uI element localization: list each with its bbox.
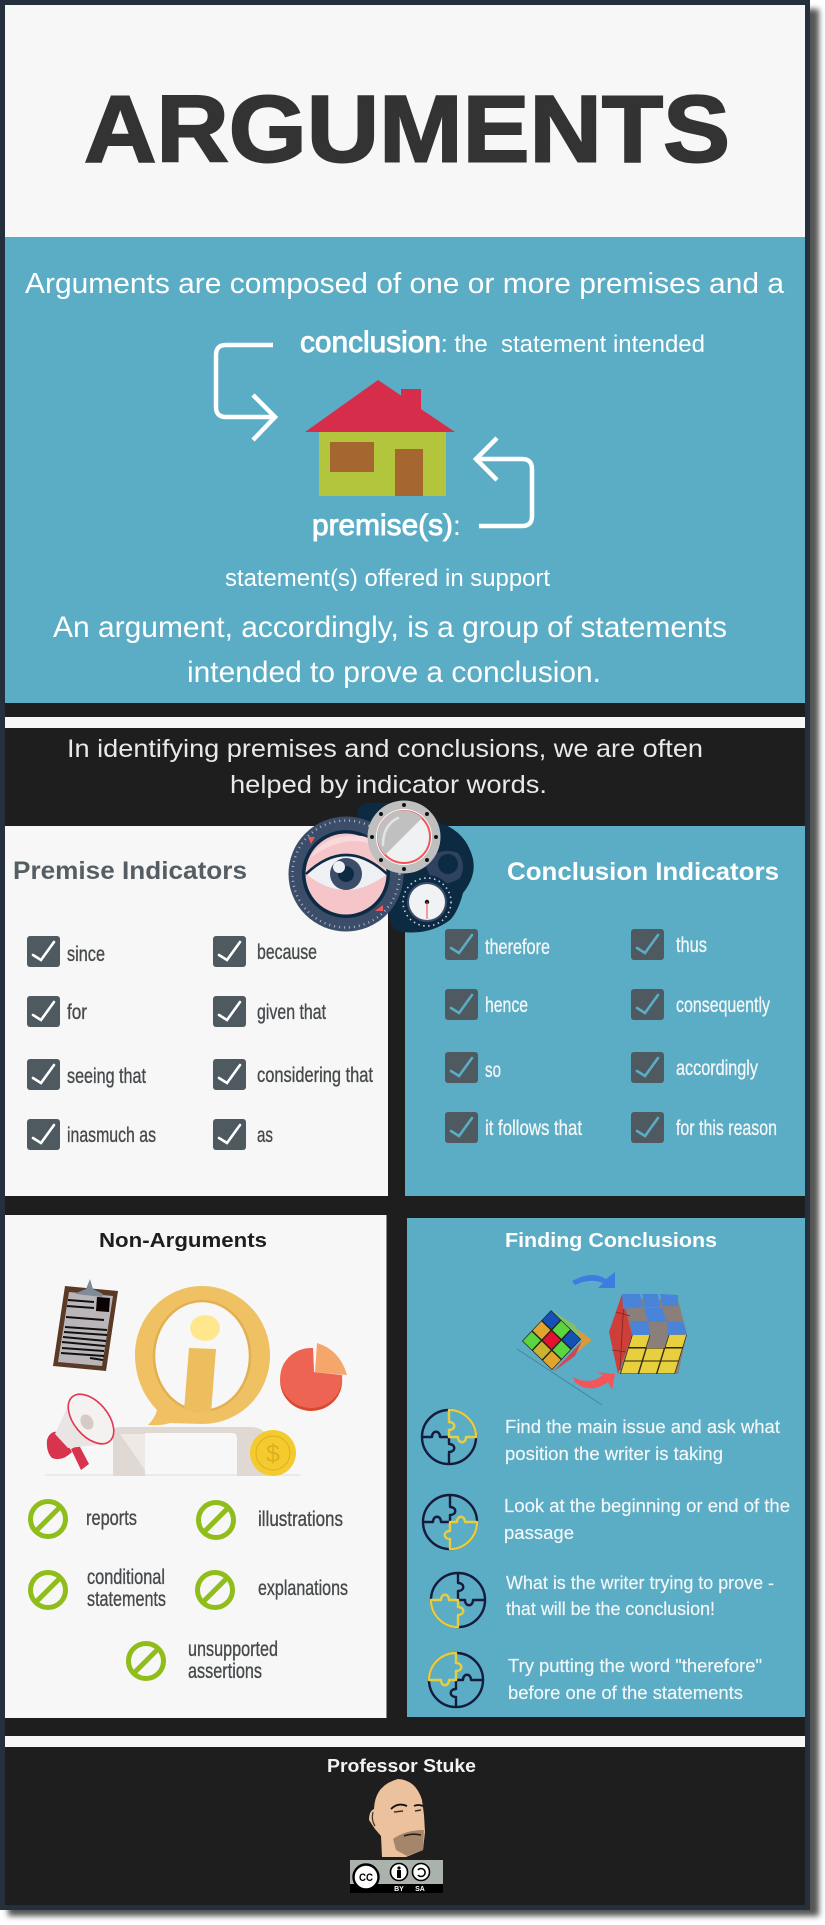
item: since xyxy=(27,936,105,967)
text: step 1 xyxy=(505,1417,780,1464)
conclusion label xyxy=(300,326,705,359)
illustration: coin: $ xyxy=(266,1440,280,1468)
item: given that: given that xyxy=(257,1000,326,1024)
item: given that xyxy=(213,996,326,1027)
item: consequently: consequently xyxy=(676,993,770,1017)
item: seeing that xyxy=(27,1059,146,1090)
text: step 3: What is the writer trying to prove - xyxy=(506,1573,774,1593)
item: explanations xyxy=(198,1572,348,1608)
item: inasmuch as xyxy=(27,1119,156,1150)
item: so: so xyxy=(485,1058,501,1082)
text: step 1: position the writer is taking xyxy=(505,1444,723,1464)
item: conditional statements: statements xyxy=(87,1587,166,1611)
item: accordingly: accordingly xyxy=(676,1056,758,1080)
footer xyxy=(327,1756,476,1893)
item: thus: thus xyxy=(676,933,707,957)
heading: Finding Conclusions xyxy=(505,1230,717,1252)
illustration: coin xyxy=(250,1430,296,1476)
license badge: CC xyxy=(359,1872,373,1884)
panel: finding conclusions xyxy=(407,1218,805,1717)
arrow: conclusion to house xyxy=(216,345,275,440)
text: step 4: Try putting the word "therefore" xyxy=(508,1656,762,1676)
text: step 3 xyxy=(506,1573,774,1619)
item: as: as xyxy=(257,1123,273,1147)
item: for xyxy=(27,996,87,1027)
item: because xyxy=(213,936,317,967)
item: since: since xyxy=(67,942,105,966)
item: unsupported assertions: unsupported xyxy=(188,1637,278,1661)
panel: title xyxy=(5,5,805,237)
item: it follows that xyxy=(445,1112,582,1143)
illustration: cubes and arrows xyxy=(517,1272,687,1405)
icon: puzzle 3 xyxy=(431,1573,485,1627)
license badge xyxy=(350,1860,443,1893)
item: for this reason xyxy=(631,1112,777,1143)
premise description: statement(s) offered in support xyxy=(225,565,550,592)
item: seeing that: seeing that xyxy=(67,1064,146,1088)
panel: definition xyxy=(5,237,805,703)
text: step 2 xyxy=(504,1496,790,1543)
item: as xyxy=(213,1119,273,1150)
text: step 2: passage xyxy=(504,1523,574,1543)
illustration: information symbol xyxy=(45,1286,300,1476)
portrait xyxy=(369,1779,425,1857)
item: considering that: considering that xyxy=(257,1063,373,1087)
item: unsupported assertions: assertions xyxy=(188,1659,262,1683)
illustration: pie chart xyxy=(280,1343,347,1411)
heading: Conclusion Indicators xyxy=(507,858,779,886)
item: so xyxy=(445,1052,501,1083)
item: reports xyxy=(30,1502,137,1536)
item: conditional statements: conditional xyxy=(87,1565,165,1589)
icon: puzzle 4 xyxy=(429,1653,483,1707)
item: consequently xyxy=(631,989,770,1020)
argument definition: An argument, accordingly, is a group of statements xyxy=(53,611,727,644)
item: illustrations xyxy=(198,1502,343,1538)
item: explanations: explanations xyxy=(258,1576,348,1600)
conclusion label: conclusion xyxy=(300,326,441,359)
item: accordingly xyxy=(631,1052,758,1083)
item: inasmuch as: inasmuch as xyxy=(67,1123,156,1147)
argument definition xyxy=(53,611,727,689)
text: step 4 xyxy=(508,1656,762,1703)
panel: non-arguments xyxy=(5,1215,387,1718)
premise label: premise(s) xyxy=(312,509,453,542)
panel: conclusion indicators xyxy=(405,826,805,1196)
item: thus xyxy=(631,929,707,960)
conclusion label: : the statement intended xyxy=(441,331,705,358)
icon: eye and gauges xyxy=(288,800,474,932)
intro text: Arguments are composed of one or more premises and a xyxy=(25,268,785,300)
title: ARGUMENTS xyxy=(84,76,730,182)
indicator intro text xyxy=(67,735,703,799)
illustration: megaphone xyxy=(47,1386,123,1470)
item: reports: reports xyxy=(86,1506,137,1530)
text: step 1: Find the main issue and ask what xyxy=(505,1417,780,1437)
item: therefore xyxy=(445,929,550,960)
license badge: SA xyxy=(415,1886,425,1893)
item: conditional statements xyxy=(30,1565,166,1611)
item: it follows that: it follows that xyxy=(485,1116,582,1140)
heading: Non-Arguments xyxy=(99,1230,267,1252)
text: step 2: Look at the beginning or end of the xyxy=(504,1496,790,1516)
license badge: BY xyxy=(394,1886,404,1893)
panel: premise indicators xyxy=(5,826,388,1196)
item: hence xyxy=(445,989,528,1020)
indicator intro text: helped by indicator words. xyxy=(230,771,547,799)
item: illustrations: illustrations xyxy=(258,1507,343,1531)
item: because: because xyxy=(257,940,317,964)
argument definition: intended to prove a conclusion. xyxy=(187,656,601,689)
icon: house xyxy=(305,380,455,496)
heading: Premise Indicators xyxy=(13,857,247,885)
icon: puzzle 2 xyxy=(423,1495,477,1549)
item: considering that xyxy=(213,1059,373,1090)
text: step 3: that will be the conclusion! xyxy=(506,1599,715,1619)
indicator intro text: In identifying premises and conclusions, we are often xyxy=(67,735,703,763)
icon: puzzle 1 xyxy=(422,1410,476,1464)
item: unsupported assertions xyxy=(128,1637,278,1683)
item: for: for xyxy=(67,1000,87,1024)
illustration: clipboard xyxy=(53,1279,118,1371)
premise label: : xyxy=(453,510,461,541)
arrow: premise to house xyxy=(476,438,532,526)
author name: Professor Stuke xyxy=(327,1756,476,1776)
item: for this reason: for this reason xyxy=(676,1116,777,1140)
item: hence: hence xyxy=(485,993,528,1017)
text: step 4: before one of the statements xyxy=(508,1683,743,1703)
item: therefore: therefore xyxy=(485,935,550,959)
